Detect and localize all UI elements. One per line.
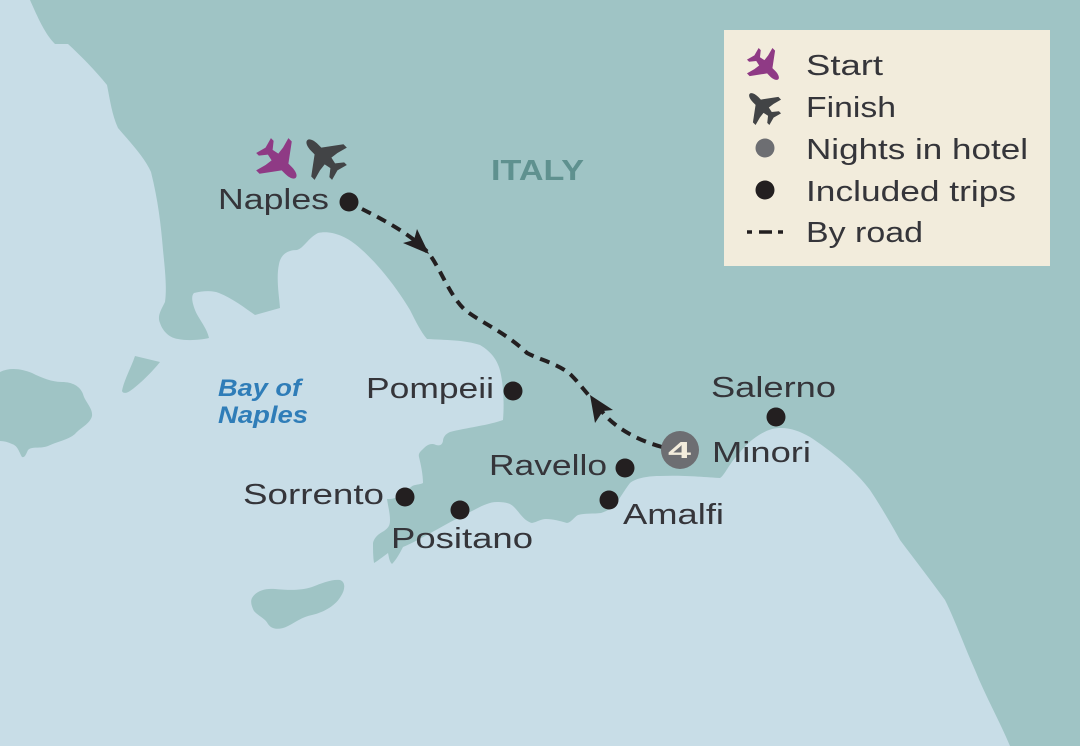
legend: nights in hotel [756,134,1028,166]
water label: Bay of [218,375,303,402]
place: Naples [218,184,358,216]
legend: included trips [756,176,1016,208]
water label [218,375,308,429]
place: Positano [391,500,533,555]
legend: by road: By road [806,217,923,249]
legend: finish: Finish [806,92,896,124]
place: Ravello: Ravello [489,450,607,482]
icon: start plane at Naples [247,129,312,194]
island: Capri [251,580,344,629]
place: Positano: Positano [391,523,533,555]
legend: included trips: Included trips [806,176,1016,208]
arrowhead: outbound [403,229,429,254]
route: Minori back to Naples direction [598,406,662,447]
country label: ITALY [491,155,584,187]
place: Minori with 4 nights badge: 4 [668,437,691,463]
route: Naples to Minori by road [362,209,592,399]
water label: Naples [218,402,308,429]
island: Procida [122,356,160,393]
place: Salerno: Salerno [711,372,836,404]
place: Ravello [489,450,634,482]
place: Naples: Naples [218,184,329,216]
legend: finish [737,81,896,132]
place: Amalfi [600,490,724,531]
place: Pompeii [366,373,522,405]
legend panel [724,30,1050,266]
place: Minori with 4 nights badge [661,431,811,469]
arrowhead: return [590,395,613,423]
legend: nights in hotel: Nights in hotel [806,134,1028,166]
legend: start: Start [806,50,883,82]
place: Sorrento [243,479,414,511]
place: Pompeii: Pompeii [366,373,494,405]
place: Sorrento: Sorrento [243,479,384,511]
place: Salerno [711,372,836,426]
place: Amalfi: Amalfi [623,499,724,531]
island: Ischia [0,369,92,457]
legend: start [740,41,883,92]
icon: finish plane at Naples [291,124,356,189]
place: Minori with 4 nights badge: Minori [712,437,811,469]
